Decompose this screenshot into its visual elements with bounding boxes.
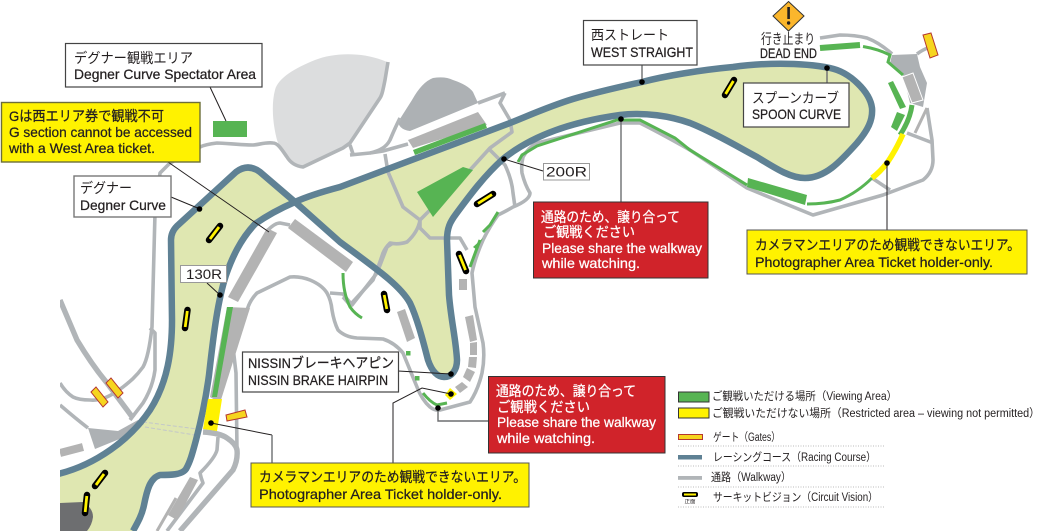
legend: walkway: 通路（Walkway） (711, 470, 791, 484)
legend: circuit vision: サーキットビジョン（Circuit Vision） (713, 491, 878, 504)
callout: photographer area east: Photographer Area Ticket holder-only. (755, 254, 993, 270)
stands hairpin right (455, 315, 477, 393)
spoon plaza (890, 54, 927, 107)
legend: gates: ゲート（Gates） (713, 431, 780, 444)
walkway lower west (60, 405, 88, 428)
callout: red walkway south: 通路のため、譲り合って (496, 383, 636, 399)
gate east (923, 33, 938, 58)
leader red north (620, 119, 622, 202)
label: dead end (760, 31, 817, 61)
restricted: 130R (203, 399, 222, 431)
walkways (60, 35, 933, 531)
callout: G section: G section cannot be accessed (9, 124, 192, 140)
viewing area: Degner (213, 121, 247, 137)
viewing area: stand B arc (343, 273, 362, 318)
viewing area: small squares (406, 351, 420, 380)
leader 130R yellow vertical (271, 435, 273, 463)
leader spectator (210, 87, 226, 121)
label: Degner Curve Spectator Area: デグナー観戦エリア (74, 50, 193, 66)
legend: viewing area (678, 389, 897, 403)
small square stand (459, 279, 467, 290)
track infield green (58, 64, 872, 531)
dashed crossing lines (143, 422, 197, 435)
viewing area: back stretch thin (807, 178, 872, 204)
screen 7 (384, 294, 387, 310)
stand A (228, 228, 277, 302)
walkway south thick (180, 432, 237, 531)
callout: red walkway north: while watching. (541, 255, 640, 271)
screen 6 (459, 254, 466, 271)
screen 4 (85, 495, 87, 513)
restricted: spoon (872, 134, 903, 178)
gate south (226, 410, 247, 421)
walkway spoon top (820, 35, 892, 54)
walkway to dark ground (370, 118, 400, 153)
gate west 2 (106, 378, 123, 398)
circuit map (58, 33, 938, 531)
label: Nissin brake hairpin: NISSIN BRAKE HAIRPIN (248, 372, 388, 388)
leader photographer east (886, 163, 888, 230)
walkway spoon connector (907, 133, 933, 143)
legend: walkway (678, 470, 791, 484)
gates (91, 33, 938, 421)
label: Nissin brake hairpin (242, 352, 398, 392)
label: West Straight (584, 20, 697, 65)
restricted areas (203, 134, 903, 431)
viewing area: back stretch block (747, 178, 807, 205)
viewing area: strip (470, 240, 480, 267)
label: Degner Curve: Degner Curve (80, 197, 166, 213)
callout: red walkway north: ご観戦ください (543, 224, 635, 240)
walkway stub (350, 145, 353, 154)
leader 130R yellow (211, 423, 272, 435)
screen 5 (477, 194, 493, 204)
label: 130R (180, 266, 226, 282)
viewing area: long inner strip (518, 120, 747, 185)
viewing area: wedge (473, 238, 483, 250)
stand B (288, 219, 353, 272)
callout: red walkway south: ご観戦ください (497, 399, 590, 415)
walkway beside 130R (233, 347, 237, 450)
callout: G section: Gは西エリア券で観戦不可 (9, 108, 164, 124)
viewing area: 200R dash (483, 212, 498, 232)
walkway north west (60, 62, 388, 400)
label: 130R: 130R (186, 266, 222, 282)
gray segment lower west (60, 447, 83, 453)
screen 1 (209, 226, 220, 240)
label: Degner Curve Spectator Area (66, 44, 262, 87)
lower stand strip (157, 498, 176, 531)
legend: circuit vision: 正面 (684, 499, 696, 505)
gate west 1 (91, 387, 108, 407)
lower stand (168, 477, 198, 520)
walkway south thin (167, 437, 218, 531)
racing course (58, 64, 872, 531)
walkway yellow connector (872, 178, 890, 190)
walkways centre network (350, 144, 408, 155)
callout: photographer area south: Photographer Area Ticket holder-only. (259, 486, 502, 502)
label: Nissin brake hairpin: NISSINブレーキヘアピン (248, 355, 394, 371)
label: Degner Curve Spectator Area: Degner Curve Spectator Area (74, 66, 256, 82)
legend (678, 389, 1039, 507)
label: Spoon Curve (744, 83, 849, 127)
callout: red walkway north: Please share the walkway (542, 240, 702, 256)
leader 130R (207, 283, 220, 295)
callout: photographer area east (747, 230, 1027, 274)
walkway infield 2 (478, 93, 505, 103)
stand hairpin left (397, 309, 415, 342)
screen 3 (95, 473, 105, 486)
label: Spoon Curve: SPOON CURVE (752, 106, 841, 122)
leader lines (168, 65, 887, 463)
legend: racing course: レーシングコース（Racing Course） (713, 450, 876, 464)
viewing area: spoon curve (900, 105, 912, 135)
walkway infield 3 (420, 93, 512, 250)
viewing areas (212, 45, 912, 405)
callout: G section: with a West Area ticket. (8, 140, 155, 156)
callout: red walkway south: Please share the walkway (497, 414, 656, 430)
viewing area: 130R strip (212, 307, 233, 397)
walkway branch west (130, 328, 155, 420)
label: West Straight: 西ストレート (591, 27, 669, 43)
leader photographer south (393, 388, 451, 463)
viewing area: spoon block 2 (891, 112, 905, 131)
stand C (210, 307, 250, 403)
callout: red walkway south: while watching. (496, 430, 595, 446)
stand connector (268, 223, 290, 230)
walkway near 200R (490, 150, 515, 207)
callout: photographer area east: カメラマンエリアのため観戦できないエリア。 (755, 237, 1020, 253)
spoon plaza stand (902, 73, 923, 103)
label: 200R: 200R (546, 164, 587, 180)
leader Nissin (398, 371, 451, 374)
legend: circuit vision (682, 491, 878, 505)
viewing area: north stand (413, 123, 487, 155)
leader Degner (171, 197, 200, 209)
label: Degner Curve: デグナー (80, 180, 132, 196)
viewing area: hairpin arcs (423, 393, 447, 405)
legend: gates (678, 431, 780, 444)
viewing area: triangle (417, 167, 473, 217)
walkway centre spur (330, 243, 393, 305)
leader west straight (641, 65, 643, 82)
viewing area: spoon block 1 (888, 81, 906, 109)
restricted: hairpin (445, 388, 457, 400)
leader 200R (504, 159, 543, 171)
stand north (408, 112, 487, 148)
callout: photographer area south: カメラマンエリアのため観戦できないエリア。 (259, 469, 526, 485)
icon: dead end warning (773, 2, 804, 31)
label: West Straight: WEST STRAIGHT (591, 44, 693, 60)
walkway from 130R to hairpin (247, 108, 933, 410)
viewing area: top block (820, 45, 860, 48)
walkway infield 1 (343, 154, 420, 305)
leader red south (438, 408, 488, 421)
leader spoon (826, 68, 828, 83)
legend: racing course (678, 450, 876, 464)
gray wedge west (88, 420, 144, 449)
screen 2 (185, 310, 188, 328)
walkway gate stub (917, 47, 930, 54)
legend dividers (678, 446, 885, 507)
callout: red walkway south (488, 376, 665, 453)
grandstands (157, 73, 927, 531)
dark gray ground bottom left (60, 502, 93, 531)
dark gray ground near stand (398, 77, 478, 131)
light gray spectator ground (273, 54, 387, 167)
label: dead end: 行き止まり (761, 31, 815, 47)
callout: G section (2, 102, 200, 162)
label: Spoon Curve: スプーンカーブ (752, 90, 839, 106)
callout: red walkway north: 通路のため、譲り合って (541, 209, 680, 225)
callout: red walkway north (534, 202, 708, 278)
viewing area: top thin (863, 46, 903, 75)
screen 8 (725, 80, 734, 95)
circuit vision screens (85, 80, 734, 513)
leader dots (197, 65, 890, 426)
label: dead end: DEAD END (760, 45, 817, 61)
thick walkway west (60, 300, 133, 418)
spoon small stand (915, 108, 927, 133)
leader G section (168, 162, 269, 232)
label: Degner Curve (74, 176, 171, 217)
legend: viewing area: ご観戦いただける場所（Viewing Area） (712, 389, 897, 403)
callout: photographer area south (251, 463, 529, 507)
